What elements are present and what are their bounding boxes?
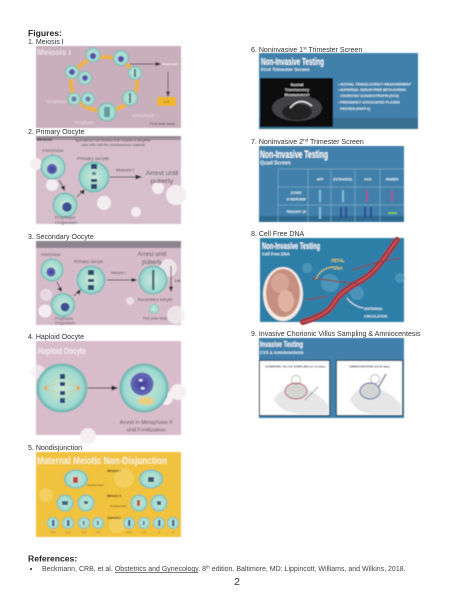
panel 6: first trimester screen [259, 53, 418, 129]
label: prophase oogonium: Oogonium [55, 320, 75, 326]
panel 7: quad screen [259, 146, 404, 222]
label: prophase oogonium: Prophase [55, 316, 74, 321]
reference entry: Beckmann, CRB, et al. Obstetrics and Gynecology. 8 [42, 566, 206, 573]
caption 4: 4. Haploid Oocyte [28, 334, 84, 341]
table column headers: AFP [316, 178, 324, 182]
caption 1: 1. Meiosis I [28, 39, 64, 46]
caption 7: Trimester Screen [308, 139, 364, 146]
stage labels: Metaphase [132, 113, 155, 118]
secondary oocyte cell [138, 266, 168, 294]
title: Meiosis: Meiosis [37, 137, 53, 142]
title: Maternal Meiotic Non-Disjunction [37, 456, 167, 467]
gamete counts: n+1 [66, 530, 71, 534]
uterus and fetus [263, 267, 303, 321]
label: prophase oogonium: Prophase [55, 215, 76, 221]
label: first polar body: First polar body [143, 316, 167, 320]
subtitle: Quad Screen [260, 160, 291, 166]
ultrasound image [260, 78, 333, 127]
panel 4: Haploid oocyte [31, 341, 186, 444]
label: primary oocyte: Primary oocyte [74, 259, 104, 264]
panel 9: CVS and amniocentesis [259, 338, 404, 418]
primary oocyte cell [76, 266, 106, 294]
label: arrest until puberty: puberty [142, 260, 162, 266]
amniocentesis card [336, 360, 402, 416]
label: LH: LH [175, 278, 180, 283]
table arrows [320, 190, 397, 219]
cell cycle cells [65, 48, 142, 122]
title: Non-Invasive Testing [261, 57, 324, 68]
caption 6: Trimester Screen [307, 47, 362, 54]
label: prophase oogonium: Oogonium [55, 220, 77, 226]
stage labels: Telophase [46, 99, 67, 104]
interphase cell [40, 258, 64, 282]
reference entry: edition. Baltimore, MD: Lippincott, Williams, and Wilkins, 2018. [210, 566, 406, 573]
panel 8: cell free DNA [260, 238, 405, 322]
reference entry [30, 564, 406, 573]
label: arrest in metaphase II [120, 420, 172, 434]
amniocentesis label: AMNIOCENTESIS (15-20 wks) [349, 364, 390, 368]
glow spots [39, 468, 134, 533]
table column headers: hCG [364, 178, 372, 182]
stage labels: Gametes [107, 516, 121, 520]
arrows to LH [130, 62, 170, 96]
ultrasound label: Translucency [285, 88, 310, 92]
dividing cell [36, 364, 88, 412]
gamete counts: n+1 [127, 530, 132, 534]
label: first polar body: First polar body [150, 122, 175, 126]
label: arrest until puberty: puberty [151, 178, 174, 185]
label: arrest until puberty [138, 252, 166, 266]
label: Meiosis I: Meiosis I [116, 168, 134, 172]
gamete counts: n [172, 530, 174, 534]
connecting arrows [59, 175, 141, 197]
nondisjunction labels: Nondisjunction [87, 483, 105, 487]
label: interphase: Interphase [41, 252, 61, 257]
bullet list [338, 82, 412, 111]
label: Meiosis I: Meiosis I [111, 271, 126, 275]
label: prophase oogonium [55, 215, 77, 226]
label: interphase: Interphase [42, 148, 64, 153]
prophase cell [52, 192, 78, 218]
label: arrest in metaphase II: Arrest in Metaphase II [120, 420, 172, 426]
label: arrest in metaphase II: until Fertilization [127, 428, 165, 434]
caption 9: 9. Invasive Chorionic Villus Sampling & Amniocentesis [251, 331, 421, 338]
ultrasound label: Measurement [285, 93, 310, 97]
CVS card [260, 360, 330, 416]
stage labels: Anaphase [74, 120, 95, 125]
table row labels: SYNDROME [286, 198, 307, 202]
label: maternal circulation: MATERNAL [364, 307, 383, 311]
label: fetal DNA [331, 258, 345, 270]
top header bar [36, 241, 181, 248]
stage labels [107, 469, 121, 520]
table row labels: DOWN [291, 191, 302, 195]
label: arrest until puberty: Arrest until [138, 252, 166, 258]
title: Non-Invasive Testing [260, 149, 328, 161]
bullet list: • PREGNANCY ASSOCIATED PLASMA [338, 100, 400, 104]
caption 2: 2. Primary Oocyte [28, 129, 84, 136]
nondisjunction labels: Nondisjunction [110, 504, 128, 508]
description: cells with half the chromosomal material [81, 143, 145, 147]
stage labels [46, 99, 155, 125]
title: Haploid Oocyte: Haploid Oocyte [38, 346, 86, 356]
caption 6: st [303, 46, 307, 50]
label: primary oocyte: Primary oocyte [77, 156, 109, 162]
table grid [278, 169, 404, 222]
heading: figures: Figures: [28, 28, 62, 38]
caption 7: nd [303, 138, 309, 142]
title: Meiosis I: Meiosis I [37, 48, 71, 57]
soft circles [302, 263, 405, 300]
label: maternal circulation [364, 307, 388, 318]
label: fetal DNA: DNA [333, 266, 343, 270]
oocyte cell arrested in metaphase II [120, 364, 168, 412]
subtitle: Cell Free DNA [262, 252, 290, 256]
gamete counts: n-1 [142, 530, 146, 534]
gamete counts: n+1 [51, 530, 56, 534]
table column headers [316, 178, 399, 182]
label: prophase oogonium [55, 316, 75, 326]
nondisjunction labels [87, 483, 128, 508]
label: arrest until puberty: Arrest until [146, 170, 179, 177]
page number: 2 [234, 576, 240, 588]
table column headers: ESTRADIOL [333, 178, 353, 182]
gamete counts: n-1 [96, 530, 100, 534]
subtitle: CVS & Amniocentesis [260, 350, 304, 355]
bullet list: CHORIONIC GONADOTROPIN (hCG) [340, 94, 400, 98]
panel 5: Maternal meiotic non-disjunction [36, 452, 181, 537]
decorative bubbles [31, 365, 186, 444]
description [75, 138, 152, 147]
heading: references: References: [28, 554, 77, 564]
caption 7: 7. Noninvasive 2 [251, 139, 303, 146]
caption 3: 3. Secondary Oocyte [28, 234, 94, 241]
bullet list: • NUCHAL TRANSLUCENCY MEASUREMENT [338, 82, 412, 86]
subtitle: First Trimester Screen [261, 67, 310, 72]
bullet list: • MATERNAL SERUM FREE BETA-HUMAN [338, 88, 406, 92]
title: Invasive Testing [260, 339, 303, 349]
orange ring [71, 57, 137, 111]
label: arrest until puberty [146, 170, 179, 185]
reference entry: th [206, 564, 210, 570]
bullet list: PROTEIN (PAPP A) [340, 107, 371, 111]
CVS label: CHORIONIC VILLUS SAMPLING (11-13 wks) [265, 364, 325, 368]
interphase cell [40, 154, 66, 180]
table row labels: TRISOMY 18 [286, 210, 306, 214]
table column headers: INHIBIN [386, 178, 399, 182]
yellow arrow [316, 267, 333, 279]
stage labels: Meiosis I [107, 469, 121, 473]
bottom band [259, 216, 404, 222]
label: secondary oocyte: Secondary oocyte [137, 297, 173, 302]
first polar body cell [149, 304, 159, 314]
description: Specialized cell division that creates a daughter [75, 138, 152, 142]
title: Non-Invasive Testing [262, 241, 320, 252]
decorative bubbles [30, 158, 186, 217]
meiosis II cells [56, 494, 168, 512]
gamete counts: n [158, 530, 160, 534]
bottom band [259, 118, 418, 129]
LH label: LH [164, 99, 169, 104]
gamete counts: n-1 [82, 530, 86, 534]
ultrasound label [285, 83, 310, 97]
arrows [57, 266, 172, 296]
caption 5: 5. Nondisjunction [28, 445, 82, 452]
ultrasound label: Nuchal [291, 83, 303, 87]
primary oocyte cell [78, 162, 110, 192]
caption 6: 6. Noninvasive 1 [251, 47, 303, 54]
LH box [157, 97, 176, 106]
caption 8: 8. Cell Free DNA [251, 231, 305, 238]
panel 2: Primary oocyte [30, 136, 186, 226]
prophase cell [51, 293, 75, 317]
stage labels: Meiosis II [107, 494, 121, 498]
panel 1: Meiosis I [36, 46, 181, 128]
label: fetal DNA: FETAL [331, 258, 345, 263]
table row labels [286, 191, 307, 214]
arrow [88, 386, 117, 390]
white arrow [347, 298, 363, 308]
gamete cells [47, 517, 179, 529]
meiosis I cells [64, 470, 163, 488]
gamete counts [51, 530, 174, 534]
panel 3: Secondary oocyte [36, 241, 185, 326]
maternal blood vessel [303, 240, 400, 322]
label: maternal circulation: CIRCULATION [364, 314, 388, 318]
top header bar [36, 136, 181, 140]
label: arrest until puberty: Arrest until [163, 62, 178, 66]
decorative bubbles [38, 259, 185, 324]
